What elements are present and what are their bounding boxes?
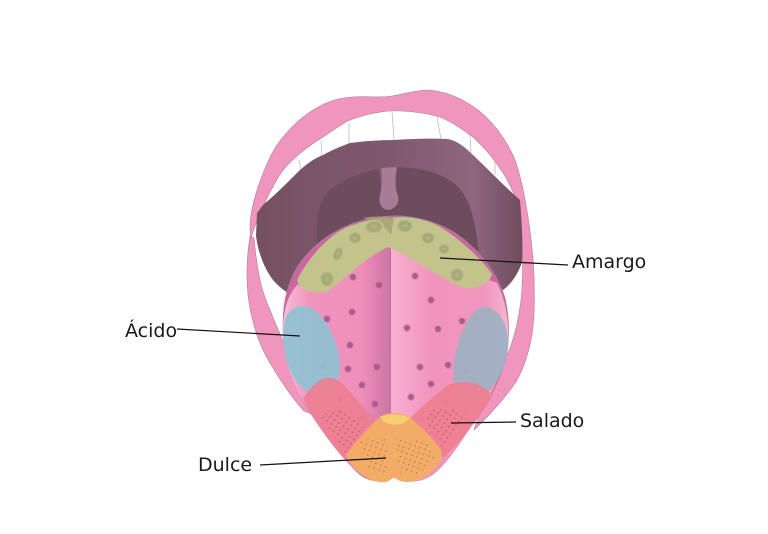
palate — [256, 139, 522, 300]
teeth — [253, 111, 518, 300]
zone: bitter (Amargo) — [297, 216, 492, 292]
throat — [317, 167, 479, 270]
label: Amargo — [440, 251, 646, 273]
tongue left half — [283, 246, 391, 480]
uvula — [379, 167, 398, 210]
label: Ácido: Ácido — [125, 319, 177, 342]
zone: salty left (Salado) — [303, 378, 378, 460]
zone: sour right (Ácido) — [453, 307, 508, 400]
upper and right lip — [250, 90, 534, 430]
label: Salado: Salado — [520, 410, 584, 432]
tongue — [283, 216, 509, 482]
label: Dulce: Dulce — [198, 454, 252, 476]
tongue base — [283, 216, 509, 481]
label: Salado — [451, 410, 584, 432]
label: Ácido — [125, 319, 300, 342]
label: Amargo: Amargo — [572, 251, 646, 273]
zone: sour left (Ácido) — [283, 306, 340, 395]
label: Dulce — [198, 454, 386, 476]
papillae — [320, 273, 469, 421]
lower-left lip — [247, 236, 312, 414]
zone: sweet (Dulce) — [346, 413, 442, 482]
mouth — [247, 90, 534, 430]
tongue right half — [391, 246, 509, 481]
zone: salty right (Salado) — [410, 382, 492, 458]
